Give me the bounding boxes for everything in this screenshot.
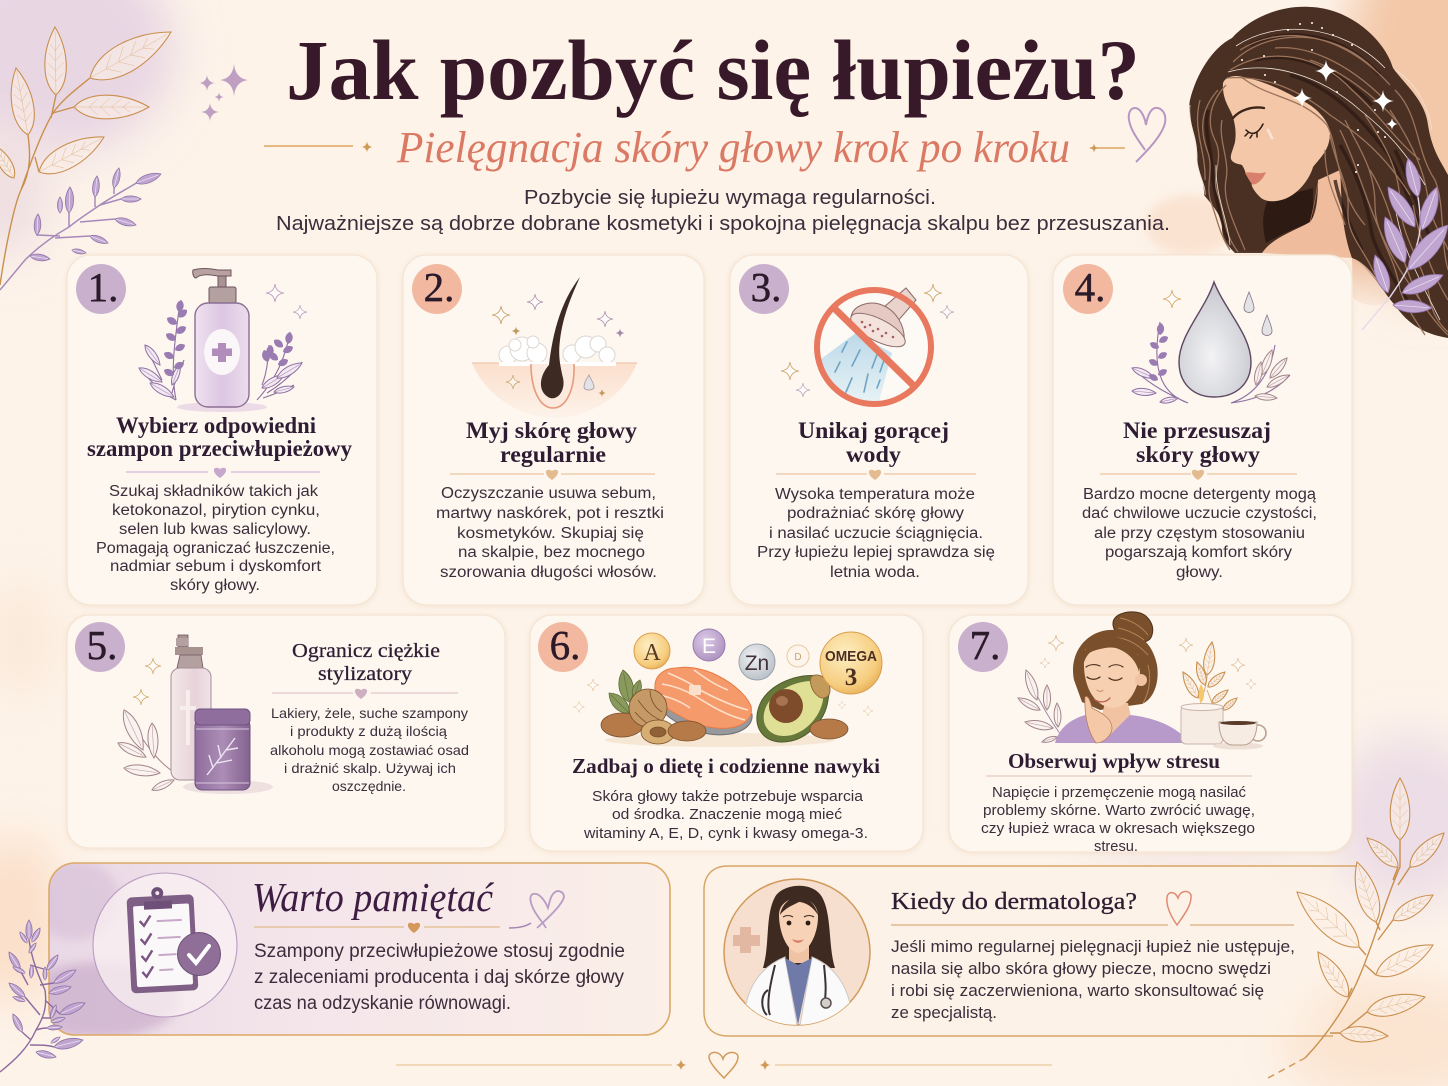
left leaves [1016,668,1061,744]
body text: witaminy A, E, D, cynk i kwasy omega-3. [583,826,868,842]
divider [891,924,1294,926]
body text: ze specjalistą. [891,1003,997,1022]
body text [436,485,664,581]
nuts [601,689,848,744]
body text: i nasilać uczucie ściągnięcia. [769,525,983,542]
body text: pogarszają komfort skóry [1105,544,1292,561]
illustration: woman with long hair [1189,7,1448,338]
watercolor wash [50,864,176,1034]
facial features [1086,665,1123,702]
stethoscope [762,965,826,1015]
body text: Jeśli mimo regularnej pielęgnacji łupież nie ustępuje, [891,937,1295,956]
sparkles near title [199,64,248,121]
vitamin capsules: Zn [745,652,769,675]
heading [1123,418,1271,467]
badge 1: 1. [88,264,118,310]
icon: small heart [530,891,564,928]
badge 1 [76,264,126,314]
vitamin capsules: D [794,652,802,663]
body text: Bardzo mocne detergenty mogą [1083,486,1316,503]
salmon [655,667,752,735]
body text: i robi się zaczerwieniona, warto skonsultować się [891,981,1264,1000]
intro text: Pozbycie się łupieżu wymaga regularności. [524,186,936,209]
icon: vitamins and healthy food: 3 [845,664,857,691]
coffee cup [1213,721,1266,750]
hair bun [1113,612,1153,642]
panel: Warto pamiętać [20,860,670,1038]
neck and shoulder [1262,170,1352,258]
body text: Oczyszczanie usuwa sebum, [441,485,656,502]
panel: step 2 [403,255,704,605]
vitamin capsules: E [702,635,716,658]
heading: stylizatory [318,663,412,685]
hair [763,886,835,968]
heading: szampon przeciwłupieżowy [87,436,352,461]
badge 7: 7. [970,622,1000,668]
badge 6 [538,622,588,672]
body text: skóry głowy. [170,577,260,594]
hand [1085,697,1112,743]
body text: Wysoka temperatura może [775,486,975,503]
heading [292,640,440,685]
body text [583,789,868,842]
heading: Kiedy do dermatologa? [891,889,1137,915]
illustration: bottom-right gold leaves [1268,778,1448,1078]
right plant [1179,641,1239,712]
heading [466,418,638,467]
body text: z zaleceniami producenta i daj skórze głowy [254,967,624,988]
hair sparkles [1241,22,1398,173]
body text: letnia woda. [830,564,920,581]
body text: od środka. Znaczenie mogą mieć [612,807,842,823]
body text [270,705,469,794]
panel: step 1 [67,255,377,605]
dark hair behind neck [1263,188,1313,243]
divider [776,470,976,480]
intro text: Najważniejsze są dobrze dobrane kosmetyki i spokojna pielęgnacja skalpu bez przesuszania. [276,212,1170,235]
body text: na skalpie, bez mocnego [458,544,645,561]
body text [891,937,1295,1022]
face [1084,647,1140,708]
divider [450,470,655,480]
footer ornament [396,1052,1052,1078]
subtitle: Pielęgnacja skóry głowy krok po kroku [396,123,1070,172]
divider [126,468,320,478]
panel: step 7 [949,612,1352,855]
leaves [605,669,644,717]
body text: i produkty z dużą ilością [290,723,447,739]
omega capsule [820,632,882,694]
heading: skóry głowy [1136,442,1261,467]
panel: step 4 [1053,255,1352,605]
heading: Unikaj gorącej [798,418,949,443]
body text: Przy łupieżu lepiej sprawdza się [757,544,995,561]
sparkles [266,284,307,319]
hair mass [1189,7,1448,338]
illustration: top-left gold leaves [0,19,178,285]
badge 4 [1063,264,1113,314]
icon: shampoo bottle with lavender [137,268,304,412]
icon: hair follicle with foam [472,277,637,418]
badge 2 [412,264,462,314]
heading: Nie przesuszaj [1123,418,1271,443]
body text [254,941,625,1014]
coat [743,957,853,1025]
badge 7 [958,622,1008,672]
body text: ale przy częstym stosowaniu [1094,525,1305,542]
heading: Ogranicz ciężkie [292,640,440,662]
badge 3: 3. [751,264,781,310]
heading: Myj skórę głowy [466,418,638,443]
vitamin capsules: A [643,640,661,666]
intro text [276,186,1170,235]
divider [254,923,531,933]
body text [96,483,335,594]
divider [272,689,458,699]
hair strands [1198,36,1448,335]
body text: ketokonazol, pirytion cynku, [112,502,320,519]
cross [733,927,760,953]
heading: wody [846,442,902,467]
vitamin capsules [634,629,809,680]
divider [986,775,1252,777]
body text: stresu. [1094,839,1138,855]
body text: podrażniać skórę głowy [787,505,964,522]
body text: nasila się albo skóra głowy piecze, mocno swędzi [891,959,1271,978]
skin behind hair [1352,258,1390,305]
badge 3 [739,264,789,314]
badge 2: 2. [424,264,454,310]
body text: alkoholu mogą zostawiać osad [270,742,469,758]
body text [757,486,995,581]
hairline [1082,636,1140,672]
icon: water drop with sprigs [1131,282,1291,405]
body text: czy łupież wraca w okresach większego [981,821,1255,837]
body text [981,785,1255,855]
body text [1082,486,1317,581]
panel: step 5 [67,615,505,848]
illustration: bottom-left lavender sprig [0,920,87,1072]
illustration: lavender over hair [1362,156,1448,330]
body text: dać chwilowe uczucie czystości, [1082,505,1317,522]
neck [789,945,809,963]
icon: doctor portrait [724,879,870,1025]
icon: spray and jar [116,635,273,794]
heading [798,418,949,467]
badge 6: 6. [550,622,580,668]
icon: small heart [1167,891,1191,925]
panel: step 6 [530,615,923,851]
hair strands [1085,618,1150,703]
body text: głowy. [1176,564,1223,581]
gold border [49,863,670,1035]
body text: nadmiar sebum i dyskomfort [110,558,322,575]
badge 5: 5. [87,622,117,668]
heading: Obserwuj wpływ stresu [1008,749,1220,773]
body text: Szukaj składników takich jak [109,483,318,500]
body text: Lakiery, żele, suche szampony [271,705,468,721]
heading: regularnie [500,442,606,467]
face [1223,76,1330,201]
body text: oszczędnie. [332,778,406,794]
card border [704,866,1357,1036]
body text: problemy skórne. Warto zwrócić uwagę, [983,803,1255,819]
dark depth strands [1206,35,1435,305]
icon: clipboard with check [93,873,237,1017]
panel: Kiedy do dermatologa [704,866,1357,1036]
badge 5 [75,622,125,672]
heading [87,413,352,461]
icon: vitamins and healthy food [574,629,882,747]
title: Jak pozbyć się łupieżu? [286,22,1140,118]
icon: purple heart [1129,108,1165,162]
body text: i drażnić skalp. Używaj ich [284,760,456,776]
heading: Wybierz odpowiedni [116,413,317,438]
body text: czas na odzyskanie równowagi. [254,993,511,1014]
heading: Warto pamiętać [252,874,495,920]
badge 4: 4. [1075,264,1105,310]
body text: Pomagają ograniczać łuszczenie, [96,540,335,557]
body text: selen lub kwas salicylowy. [119,521,311,538]
body text: szorowania długości włosów. [440,564,657,581]
avocado [757,675,830,742]
panel: step 3 [730,255,1028,605]
candle [1181,684,1223,744]
face [779,898,818,953]
icon: vitamins and healthy food: OMEGA [825,648,877,665]
facial features [1233,107,1318,222]
body text: Szampony przeciwłupieżowe stosuj zgodnie [254,941,625,962]
body text: Napięcie i przemęczenie mogą nasilać [992,785,1246,801]
shirt [785,958,812,1025]
icon: relaxed woman with candle [1016,612,1266,750]
illustration: top-left lavender sprig [0,167,162,290]
divider [1100,470,1297,480]
heading: Zadbaj o dietę i codzienne nawyki [572,754,880,778]
neck [1100,703,1132,738]
body text: kosmetyków. Skupiaj się [457,525,644,542]
body text: martwy naskórek, pot i resztki [436,505,664,522]
icon: crossed-out shower [781,284,954,405]
body text: Skóra głowy także potrzebuje wsparcia [592,789,864,805]
sweater [1055,713,1190,743]
hair [1073,630,1158,710]
